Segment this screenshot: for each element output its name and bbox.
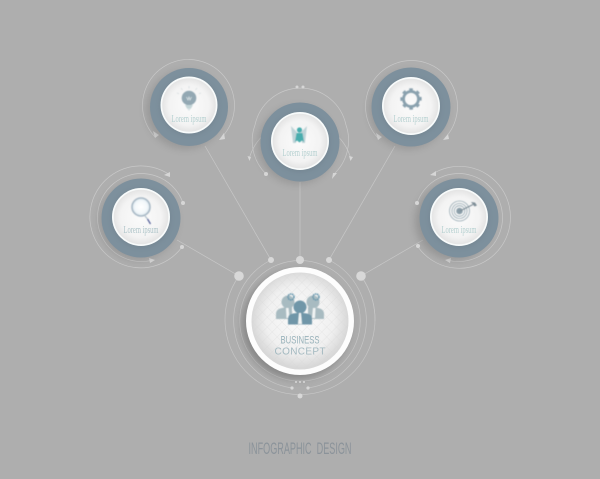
label: Lorem ipsum — [282, 148, 318, 159]
node: target — [415, 166, 510, 268]
arc arrows: people — [248, 88, 353, 179]
icon: magnifier — [132, 198, 150, 224]
label: Lorem ipsum — [394, 114, 428, 125]
arc arrows: gear — [366, 60, 458, 140]
label: Lorem ipsum — [442, 225, 476, 236]
arc arrows: lightbulb — [142, 59, 234, 140]
heading: business concept — [274, 334, 326, 358]
node: magnifier — [90, 166, 185, 268]
label: Lorem ipsum — [124, 225, 158, 236]
node: people — [248, 86, 353, 184]
icon: gear — [400, 88, 422, 110]
heading: business concept: BUSINESS — [280, 334, 320, 346]
heading: business concept: CONCEPT — [274, 346, 326, 358]
arc arrows: magnifier — [90, 166, 183, 268]
node: gear — [366, 60, 458, 149]
icon: target — [450, 201, 477, 221]
central node — [225, 256, 375, 398]
label: Lorem ipsum — [172, 114, 206, 125]
decorative dots — [264, 86, 304, 176]
arc arrows: target — [417, 166, 510, 268]
orbit rings — [225, 260, 375, 395]
icon: figures — [291, 126, 307, 143]
icon: business people — [276, 294, 324, 324]
decorative dots — [180, 201, 185, 249]
title: INFOGRAPHIC DESIGN — [248, 440, 352, 458]
decorative dots — [415, 201, 420, 248]
node: lightbulb — [142, 59, 234, 149]
connector lines — [177, 146, 423, 276]
connector nodes — [234, 256, 366, 398]
icon: lightbulb — [177, 86, 201, 111]
